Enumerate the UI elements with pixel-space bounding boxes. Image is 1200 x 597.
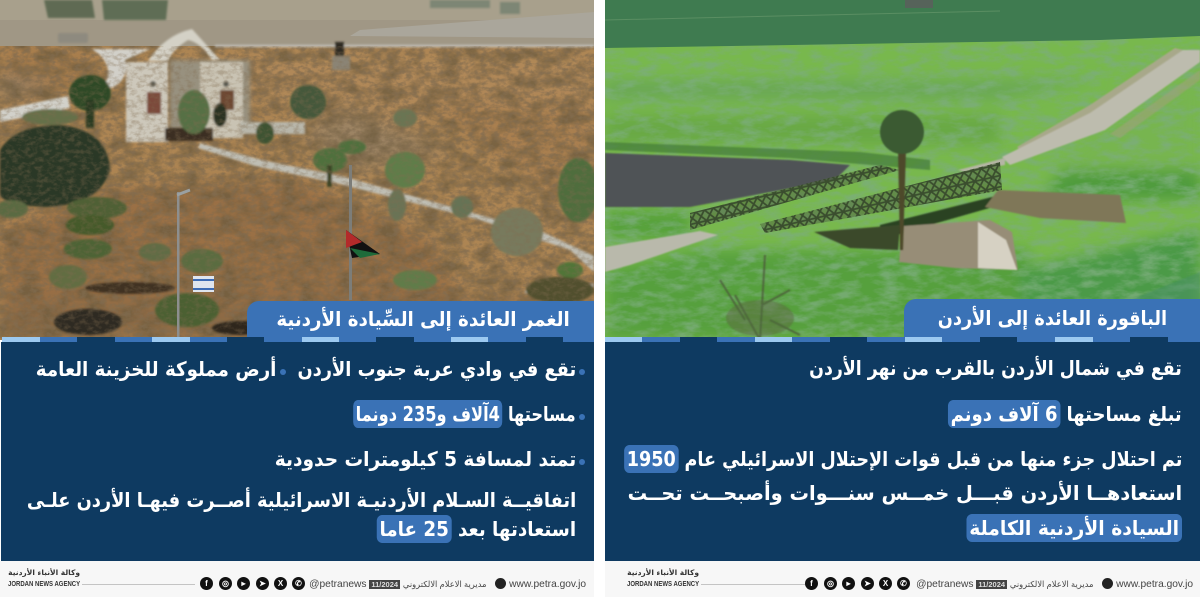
icons: left social row: ▸ — [241, 579, 246, 588]
agency logo text — [627, 568, 699, 588]
left bullets — [280, 369, 585, 465]
icons: left social row: f — [205, 579, 208, 588]
palm tree — [880, 110, 924, 250]
bridge undergrowth — [880, 195, 1000, 240]
road and embankment — [1017, 48, 1183, 150]
icons: right social row: f — [810, 579, 813, 588]
text: left peace treaty: اتفاقيــة السـلام الأردنيـة الاسرائيلية أصــرت فيهـا الأردن علـى — [27, 488, 576, 512]
gate — [126, 62, 168, 142]
left heading tab — [247, 301, 594, 342]
website and social handle: @petranews 11/2024 مديرية الاعلام الالكتروني www.petra.gov.jo — [916, 579, 1193, 590]
text: left border length: تمتد لمسافة 5 كيلومترات حدودية — [275, 447, 576, 471]
agency logo text: JORDAN NEWS AGENCY — [627, 579, 699, 588]
text: right restoration: استعادهــا الأردن قبـــل خمــس سنـــوات وأصبحــت تحــت — [627, 481, 1182, 505]
far field and tree — [605, 0, 1200, 48]
text: right sovereignty: السيادة الأردنية الكاملة — [969, 516, 1179, 540]
text: right area — [948, 400, 1182, 428]
text: left line 1 ownership: أرض مملوكة للخزينة العامة — [35, 357, 276, 381]
river channel — [605, 153, 850, 207]
icons: right social row: X — [883, 579, 888, 588]
title: Al-Baqoura: الباقورة العائدة إلى الأردن — [938, 306, 1167, 330]
agency logo text: وكالة الأنباء الأردنية — [8, 568, 80, 577]
photo: Al-Baqoura bridge and green fields — [605, 0, 1200, 337]
text: right occupation: 1950 — [626, 447, 675, 471]
right heading tab — [904, 299, 1200, 342]
left tricolour strip — [2, 337, 563, 342]
text: left area — [353, 400, 576, 428]
text: left line 1 location: تقع في وادي عربة جنوب الأردن — [297, 357, 576, 381]
bridge — [690, 162, 1002, 233]
text: left restoration — [376, 515, 576, 543]
footer: right — [605, 561, 1200, 597]
bare foreground tree — [720, 255, 800, 340]
poles and flags — [177, 165, 380, 338]
roads — [215, 45, 594, 47]
text: left restoration: استعادتها بعد — [458, 517, 576, 541]
text: left area: مساحتها — [508, 402, 576, 426]
icons: right social row: ➤ — [864, 579, 871, 588]
left footer rule — [82, 584, 195, 585]
icons: right social row: ▸ — [846, 579, 850, 588]
right tricolour strip — [605, 337, 1168, 342]
panel: left dark blue body — [1, 342, 594, 561]
title: Al-Ghumar: الغمر العائدة إلى السِّيادة الأردنية — [277, 307, 570, 331]
vegetation — [0, 125, 110, 207]
icons: right social row: ◎ — [827, 579, 834, 588]
icons: left social row: ➤ — [259, 579, 266, 588]
website and social handle: @petranews 11/2024 مديرية الاعلام الالكتروني www.petra.gov.jo — [309, 579, 586, 590]
text: right area: 6 آلاف دونم — [951, 402, 1058, 426]
footer: left — [0, 561, 594, 597]
icons: left social row: ✆ — [295, 579, 302, 588]
right footer rule — [701, 584, 805, 585]
agency logo text: JORDAN NEWS AGENCY — [8, 579, 80, 588]
broken concrete pier — [899, 220, 1018, 270]
icons: right social row: ✆ — [900, 579, 907, 588]
text: left area: 4آلاف و235 دونما — [356, 402, 500, 426]
agency logo text: وكالة الأنباء الأردنية — [627, 568, 699, 577]
icons: left social row: X — [278, 579, 283, 588]
panel: right dark blue body — [605, 342, 1200, 561]
text: left restoration: 25 عاما — [379, 517, 449, 541]
icons: right social row — [805, 577, 910, 590]
icons: left social row: ◎ — [222, 579, 229, 588]
text: right location: تقع في شمال الأردن بالقرب من نهر الأردن — [809, 356, 1182, 380]
text: right occupation: تم احتلال جزء منها من قبل قوات الإحتلال الاسرائيلي عام — [684, 447, 1182, 471]
text: right area: تبلغ مساحتها — [1067, 402, 1182, 426]
photo: Al-Ghumar border gate and dry hills — [0, 0, 594, 340]
icons: left social row — [200, 577, 305, 590]
agency logo text — [8, 568, 80, 588]
